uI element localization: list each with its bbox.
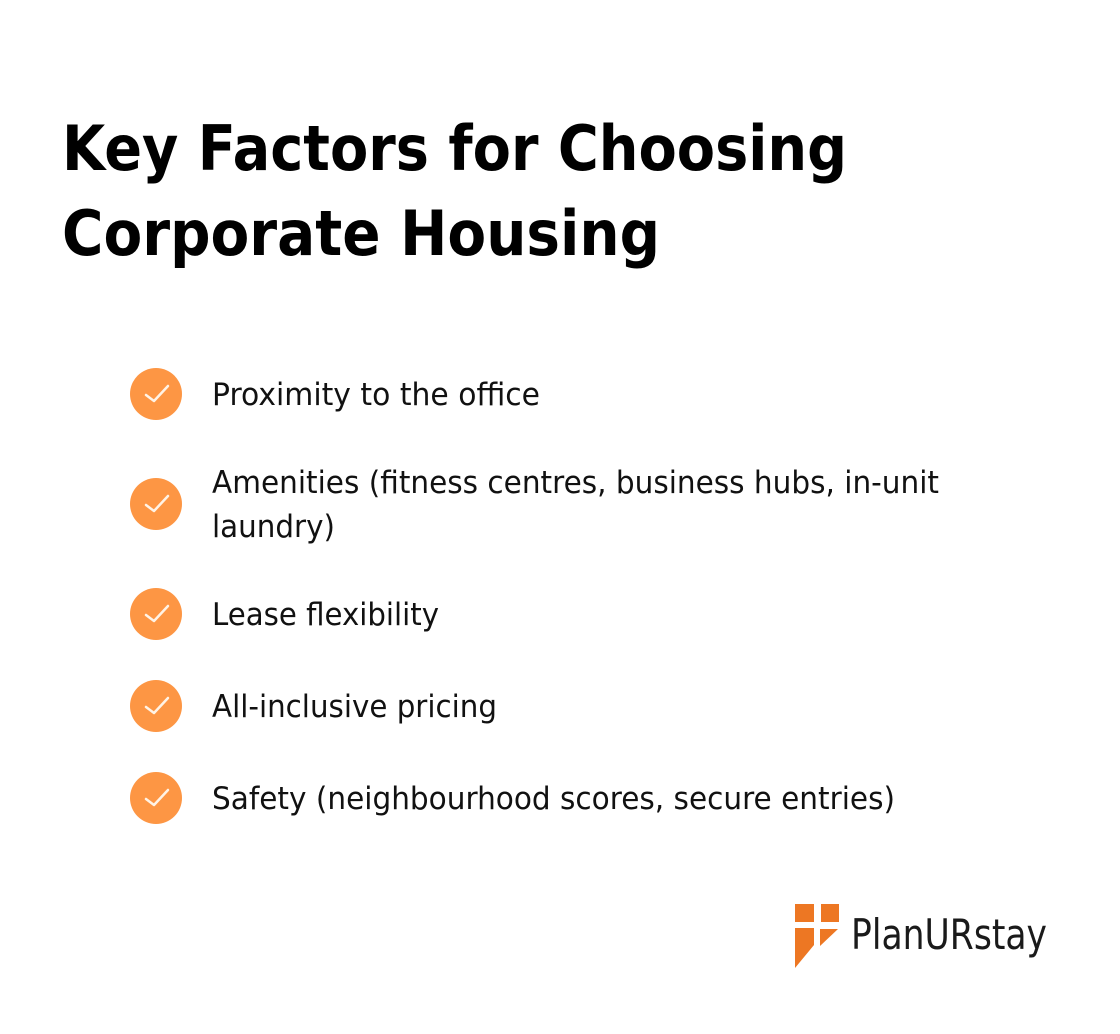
item: amenities: laundry) — [212, 509, 335, 545]
item: safety — [130, 772, 895, 824]
item: lease flexibility — [130, 588, 439, 640]
logo: PlanURstay — [795, 904, 1047, 968]
item: pricing — [130, 680, 497, 732]
item: safety: Safety (neighbourhood scores, secure entries) — [212, 781, 895, 817]
icon: logo mark — [795, 904, 839, 968]
item: lease flexibility: Lease flexibility — [212, 597, 439, 633]
item: pricing: All-inclusive pricing — [212, 689, 497, 725]
item: amenities: Amenities (fitness centres, business hubs, in-unit — [212, 465, 939, 501]
title — [62, 112, 847, 270]
logo wordmark: PlanURstay — [851, 910, 1047, 959]
checklist — [130, 368, 939, 824]
title: Key Factors for Choosing — [62, 112, 847, 185]
item: proximity: Proximity to the office — [212, 377, 540, 413]
item: proximity — [130, 368, 540, 420]
title: Corporate Housing — [62, 197, 660, 270]
item: amenities — [130, 465, 939, 545]
